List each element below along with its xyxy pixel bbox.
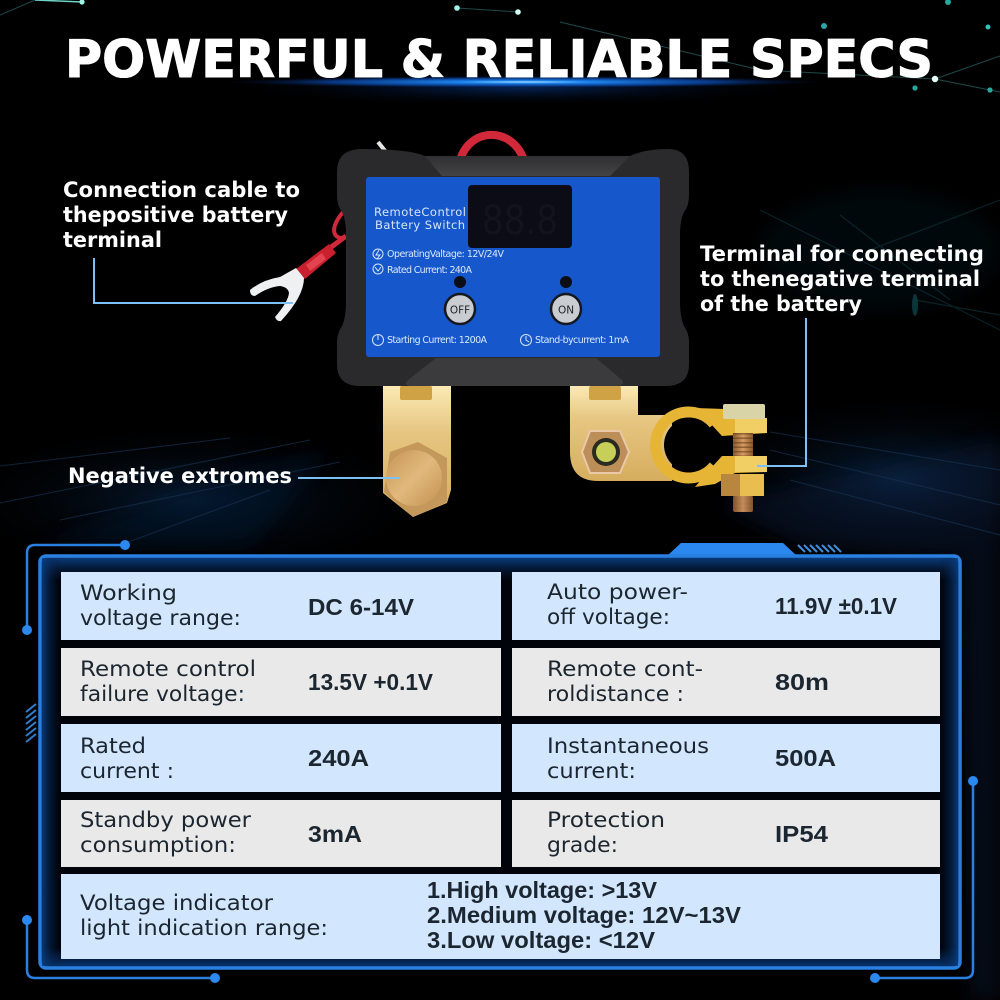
leader line [757, 318, 806, 466]
callout: negative terminal: Terminal for connecting [700, 242, 984, 267]
row 5 voltage indicator: 2.Medium voltage: 12V~13V [427, 902, 742, 928]
spec: standby current: Stand-bycurrent: 1mA [535, 335, 630, 346]
row 4 left: consumption: [80, 833, 236, 858]
row 1 right [512, 572, 940, 640]
row 2 right [512, 648, 940, 716]
row 5 voltage indicator [61, 874, 940, 959]
row 1 right: off voltage: [547, 605, 670, 630]
row 3 left: 240A [308, 745, 369, 771]
row 2 right: 80m [775, 669, 829, 695]
row 4 right: IP54 [775, 821, 828, 847]
row 1 left: DC 6-14V [308, 594, 415, 620]
row 2 left [61, 648, 501, 716]
product name: RemoteControl [374, 205, 466, 219]
ON button [551, 294, 581, 324]
blue front panel [366, 177, 660, 357]
callout: positive cable: thepositive battery [63, 203, 288, 228]
callout: positive cable: terminal [63, 228, 162, 253]
row 3 right: 500A [775, 745, 836, 771]
spec: rated current: Rated Current: 240A [387, 265, 472, 276]
OFF button [445, 294, 475, 324]
right gold bracket with clamp [570, 386, 767, 512]
LED display: 88.8 [482, 198, 558, 244]
row 1 right: 11.9V ±0.1V [775, 593, 898, 619]
clamp ring [656, 404, 767, 512]
leader line [94, 258, 293, 303]
hex nut [582, 431, 629, 473]
row 2 left: 13.5V +0.1V [308, 669, 434, 695]
left gold bracket with bolt [383, 386, 451, 517]
row 5 voltage indicator: light indication range: [80, 916, 328, 941]
row 4 left [61, 800, 501, 867]
indicator LEDs [454, 276, 572, 288]
row 5 voltage indicator: 1.High voltage: >13V [427, 877, 658, 903]
row 2 right: Remote cont- [547, 657, 703, 682]
callout: negative terminal [700, 242, 984, 466]
row 1 left: Working [80, 581, 177, 606]
callout: positive cable [63, 178, 300, 303]
row 3 right [512, 724, 940, 792]
row 2 left: Remote control [80, 657, 256, 682]
row 3 left [61, 724, 501, 792]
switch body [337, 149, 689, 386]
frame [40, 556, 960, 968]
row 1 right: Auto power- [547, 580, 688, 605]
spec: starting current: Starting Current: 1200A [387, 335, 488, 346]
title: POWERFUL & RELIABLE SPECS [65, 30, 933, 90]
row 5 voltage indicator: 3.Low voltage: <12V [427, 927, 656, 953]
row 3 left: Rated [80, 734, 146, 759]
row 4 right [512, 800, 940, 867]
title glow line [220, 70, 825, 106]
row 1 left: voltage range: [80, 606, 241, 631]
callout: negative extremes: Negative extromes [68, 464, 292, 489]
row 2 right: roldistance : [547, 682, 684, 707]
product: remote battery switch [250, 135, 767, 517]
ON button: ON [558, 304, 574, 316]
row 5 voltage indicator: Voltage indicator [80, 891, 273, 916]
row 3 left: current : [80, 759, 174, 784]
decorative outer frame [22, 540, 978, 983]
callout: negative terminal: to thenegative terminal [700, 267, 980, 292]
row 4 right: grade: [547, 833, 618, 858]
network specks [0, 0, 1000, 316]
row 4 left: Standby power [80, 808, 251, 833]
callout: positive cable: Connection cable to [63, 178, 300, 203]
spec: operating voltage: OperatingValtage: 12V/24V [387, 249, 504, 260]
red cables [330, 135, 524, 248]
blue front panel: Battery Switch [375, 218, 465, 232]
row 3 right: current: [547, 759, 636, 784]
leader line [298, 477, 400, 479]
OFF button: OFF [450, 304, 470, 316]
row 3 right: Instantaneous [547, 734, 709, 759]
row 4 left: 3mA [308, 821, 362, 847]
LED display [468, 185, 572, 248]
panel: specifications table [22, 540, 978, 983]
white wire stub [378, 142, 405, 155]
row 1 left [61, 572, 501, 640]
row 2 left: failure voltage: [80, 682, 245, 707]
ring terminal fork [250, 244, 336, 321]
callout: negative terminal: of the battery [700, 292, 862, 317]
row 4 right: Protection [547, 808, 665, 833]
